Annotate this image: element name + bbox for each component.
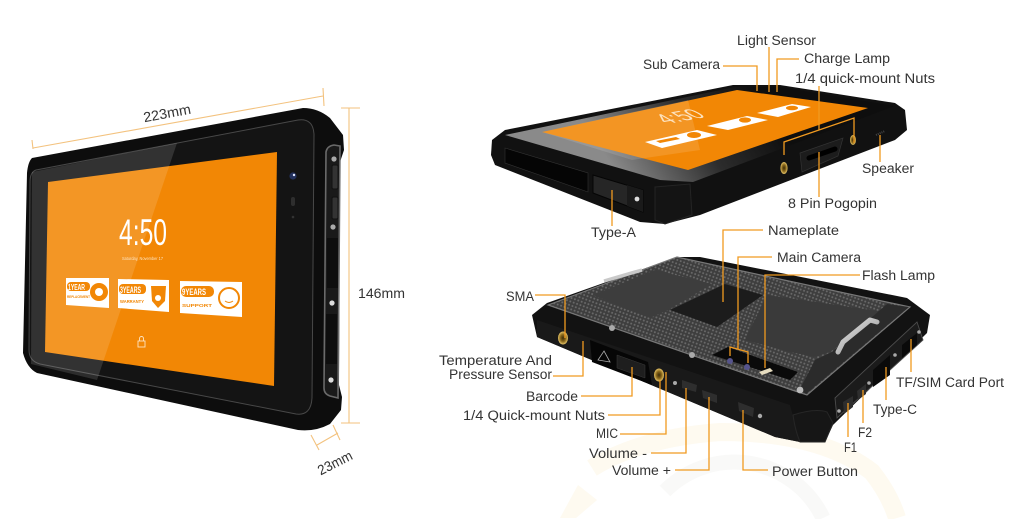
side screws	[331, 156, 337, 162]
charge lamp	[292, 216, 294, 218]
pogopin slot	[809, 149, 835, 158]
callout: Barcode	[526, 367, 632, 404]
callout: Power Button	[743, 410, 858, 479]
callout: Flash Lamp	[765, 268, 935, 368]
callout: TF/SIM Card Port: TF/SIM Card Port	[896, 375, 1004, 390]
side buttons	[332, 165, 338, 189]
front view tablet	[23, 108, 344, 430]
screen	[45, 152, 277, 386]
laser warning icon	[598, 351, 610, 362]
callout: Flash Lamp: Flash Lamp	[862, 268, 935, 283]
tablet body	[532, 257, 930, 442]
corner bumper	[793, 411, 833, 442]
tablet body	[491, 85, 907, 224]
side face highlight	[537, 320, 800, 442]
Type-A flap	[593, 175, 643, 212]
pogopin recess	[800, 138, 843, 172]
callout: Power Button: Power Button	[772, 464, 858, 479]
TF card cover	[902, 333, 917, 358]
callout: Barcode: Barcode	[526, 389, 578, 404]
smooth panel left	[593, 270, 712, 318]
dimension: width 223mm	[32, 88, 324, 149]
callout: Light Sensor: Light Sensor	[737, 33, 817, 48]
callout: 1/4 Quick-mount Nuts: 1/4 Quick-mount Nuts	[463, 408, 605, 423]
dimension: depth 23mm	[311, 425, 355, 478]
badge: 3 years warranty: 3YEARS	[120, 285, 141, 295]
front camera	[289, 172, 297, 180]
lock icon	[138, 336, 145, 347]
dimension: width 223mm: 223mm	[142, 101, 192, 125]
glass	[505, 87, 895, 182]
flash lamp	[759, 368, 773, 375]
callout: SMA	[506, 289, 565, 338]
badge: 3 years warranty: WARRANTY	[120, 299, 144, 304]
gold mount nuts	[780, 162, 788, 174]
right side rail	[835, 322, 923, 418]
callout: Sub Camera	[643, 57, 757, 91]
callout: F1	[844, 403, 857, 455]
callout: Charge Lamp: Charge Lamp	[804, 51, 890, 66]
callout: Volume minus	[589, 388, 686, 461]
speaker holes	[876, 131, 885, 135]
screen glare	[542, 100, 700, 160]
rear angled tablet view	[532, 257, 930, 442]
flap screw	[635, 197, 639, 201]
screen glare	[31, 143, 177, 380]
callout: 8 Pin Pogopin	[788, 152, 877, 211]
callout: Light Sensor	[737, 33, 817, 92]
callout: F2	[858, 390, 872, 440]
glass bezel	[29, 120, 314, 414]
badge: 9 years support: SUPPORT	[182, 303, 212, 308]
callout: Type-C	[873, 367, 917, 417]
background watermark arcs	[560, 432, 897, 518]
screen badges	[645, 104, 811, 148]
badge: 9 years support: 9YEARS	[182, 287, 206, 298]
nameplate	[670, 284, 763, 327]
top angled tablet view	[491, 85, 907, 224]
plate screws	[609, 325, 615, 331]
callout: MIC	[596, 372, 666, 441]
callout: Volume plus	[612, 397, 709, 478]
metal handle strap right	[838, 320, 877, 352]
rear mount nut	[654, 368, 664, 382]
callout: F1: F1	[844, 440, 857, 455]
callout: Type-C: Type-C	[873, 402, 917, 417]
callout: Charge Lamp	[777, 51, 890, 92]
callout: Volume minus: Volume -	[589, 446, 647, 461]
barcode window	[590, 340, 652, 385]
callout: Temperature And Pressure Sensor: Temperature And	[439, 353, 552, 368]
light sensor	[291, 197, 295, 206]
smooth panel right	[745, 295, 885, 357]
tablet body	[23, 108, 344, 430]
badge: 9 years support	[180, 281, 242, 317]
clock: 4:50	[649, 107, 712, 127]
callout: Main Camera: Main Camera	[777, 250, 862, 265]
volume buttons	[682, 380, 697, 392]
callout: MIC: MIC	[596, 426, 618, 441]
callout: Nameplate	[723, 223, 839, 302]
dimension: height 146mm	[341, 108, 405, 423]
corner bumper	[655, 184, 692, 224]
F1 button	[843, 396, 853, 414]
date: Saturday, November 17	[122, 256, 163, 261]
dimension: depth 23mm: 23mm	[315, 447, 355, 478]
side rail	[324, 145, 340, 398]
callout: 1/4 quick-mount Nuts: 1/4 quick-mount Nuts	[795, 71, 935, 86]
right side screws	[837, 409, 841, 413]
power button	[738, 402, 754, 417]
smooth end plate	[800, 304, 909, 394]
badge: 1 year replacement: REPLACEMENT	[67, 295, 91, 299]
camera window	[712, 347, 798, 380]
screen	[542, 90, 868, 170]
dimension: height 146mm: 146mm	[358, 285, 405, 301]
callout: 1/4 quick-mount Nuts	[784, 71, 935, 155]
callout: Nameplate: Nameplate	[768, 223, 839, 238]
dotted back plate	[548, 257, 910, 395]
callout: F2: F2	[858, 425, 872, 440]
F2 button	[857, 384, 866, 400]
callout: Temperature And Pressure Sensor: Pressure Sensor	[449, 367, 553, 382]
metal strap left	[604, 270, 642, 281]
badge: 1 year replacement: 1YEAR	[68, 283, 85, 292]
Type-C cover	[873, 355, 890, 387]
SMA nut	[558, 332, 568, 344]
callout: Main Camera	[730, 250, 862, 363]
callout: 8 Pin Pogopin: 8 Pin Pogopin	[788, 196, 877, 211]
callout: Volume plus: Volume +	[612, 463, 671, 478]
callout: Type-A	[591, 190, 636, 240]
callout: TF/SIM Card Port	[896, 339, 1004, 390]
callout: SMA: SMA	[506, 289, 534, 304]
barcode module	[617, 355, 645, 378]
clock: 4:50	[119, 212, 167, 253]
badge: 3 years warranty	[118, 279, 169, 312]
callout: Type-A: Type-A	[591, 225, 636, 240]
speaker grille panel	[505, 148, 588, 192]
callout: 1/4 Quick-mount Nuts	[463, 380, 660, 423]
side screws	[673, 381, 677, 385]
callout: Speaker	[862, 135, 915, 176]
main cameras	[727, 358, 733, 364]
callout: Temperature And Pressure Sensor	[439, 341, 583, 382]
callout: Sub Camera: Sub Camera	[643, 57, 720, 72]
badge: 1 year replacement	[66, 278, 109, 308]
callout: Speaker: Speaker	[862, 161, 915, 176]
side port covers	[327, 238, 338, 288]
